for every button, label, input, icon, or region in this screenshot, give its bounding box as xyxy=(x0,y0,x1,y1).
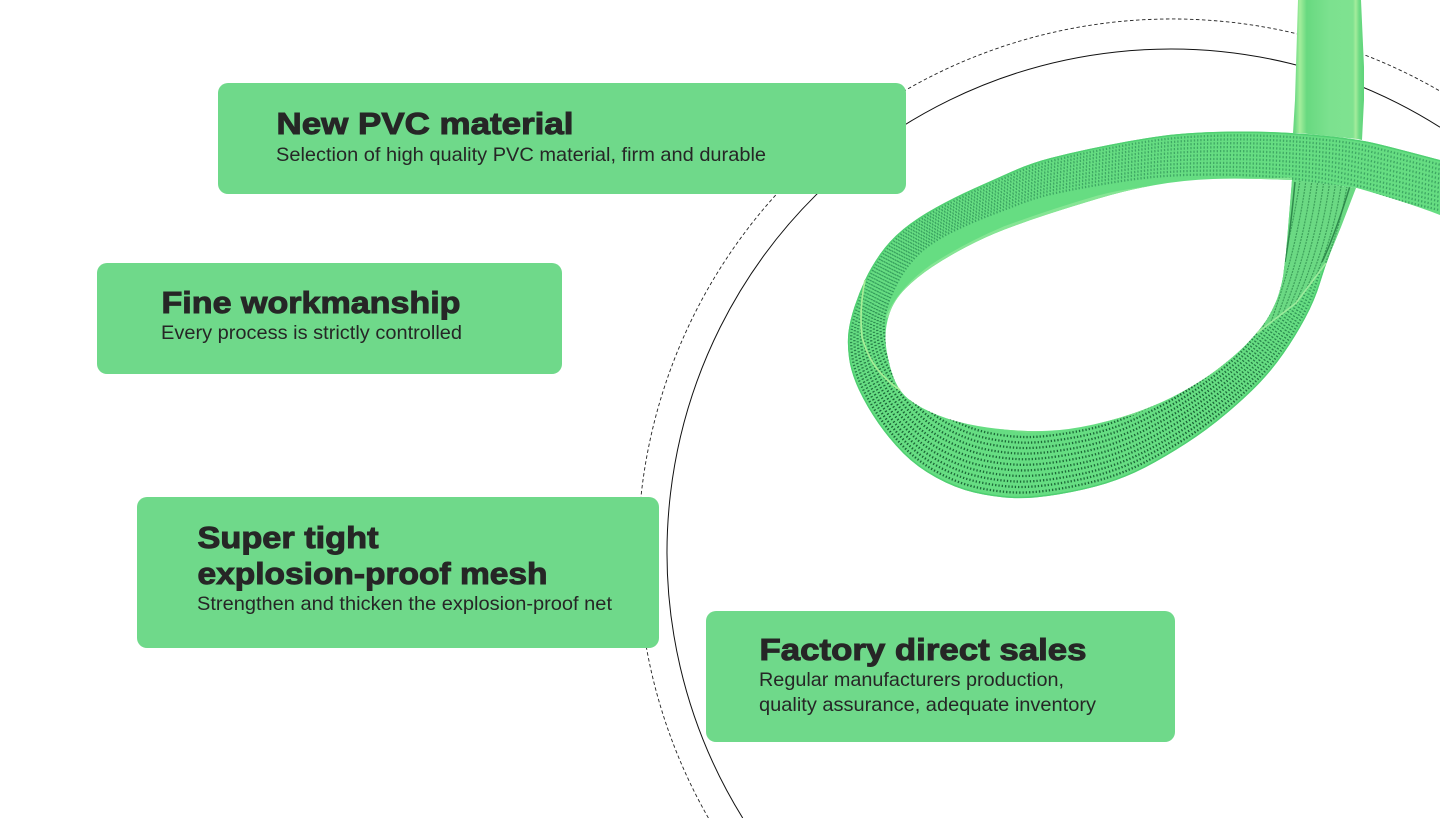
left fold highlight xyxy=(861,280,900,390)
dashed circle xyxy=(638,19,1440,818)
heading: Fine workmanship xyxy=(162,285,461,320)
solid circle xyxy=(667,49,1440,818)
description line 1: Regular manufacturers production, xyxy=(759,669,1064,691)
heading line 2: explosion-proof mesh xyxy=(198,556,548,591)
band lower edge highlight xyxy=(888,180,1292,318)
description line 2: quality assurance, adequate inventory xyxy=(759,694,1096,716)
heading line 1: Super tight xyxy=(198,520,378,555)
card: Super tight explosion-proof mesh xyxy=(137,497,659,648)
description: Selection of high quality PVC material, firm and durable xyxy=(276,144,766,166)
card: Fine workmanship xyxy=(97,263,562,374)
description: Every process is strictly controlled xyxy=(161,322,462,344)
description: Strengthen and thicken the explosion-proof net xyxy=(197,593,613,615)
upper vertical strand xyxy=(1293,0,1364,140)
card: New PVC material xyxy=(218,83,906,194)
heading: Factory direct sales xyxy=(760,632,1086,667)
card: Factory direct sales xyxy=(706,611,1175,742)
green mesh hose loop xyxy=(840,0,1440,505)
light fold edge xyxy=(1257,263,1326,333)
heading: New PVC material xyxy=(276,106,574,141)
hose loop band xyxy=(840,125,1440,505)
loop inner edge rim xyxy=(998,366,1222,433)
folded strand under the crossing xyxy=(1259,180,1356,330)
